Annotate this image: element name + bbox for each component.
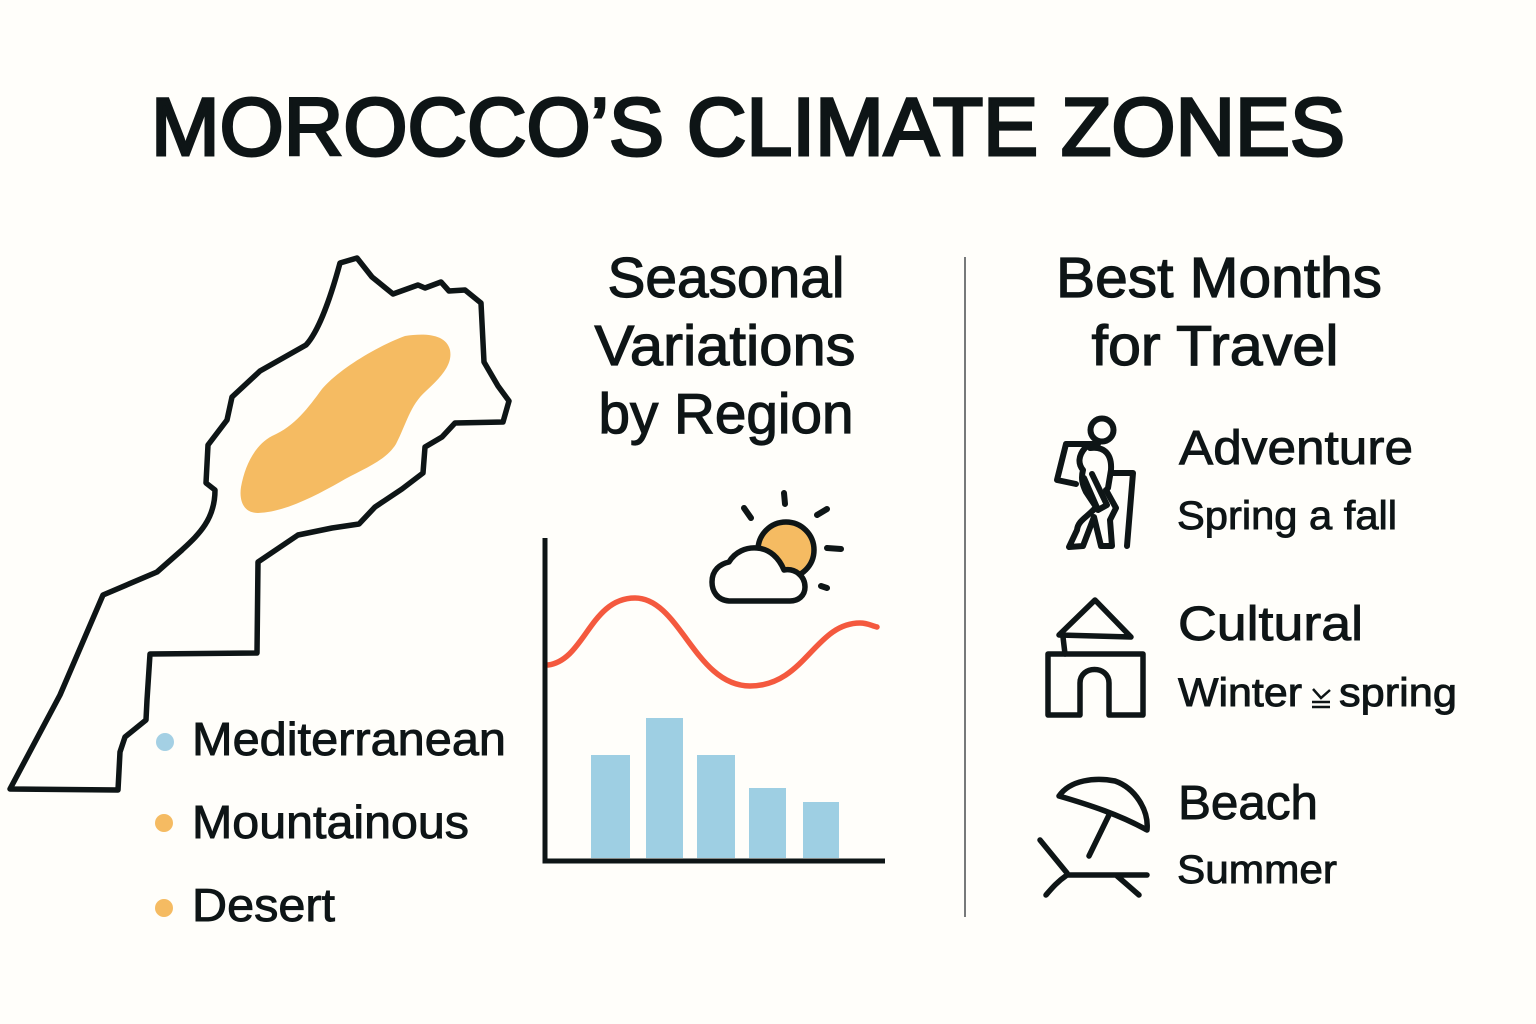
temperature curve [548,598,877,686]
chart: temperature curve and rainfall bars [545,538,885,861]
item: adventure: Spring a fall [1177,494,1397,538]
divider [964,257,966,917]
heading: seasonal variations [594,246,856,446]
item: beach: Summer [1177,848,1337,892]
legend [155,713,506,931]
heading: best months [1056,246,1382,378]
map outline [10,258,509,790]
heading: best months: for Travel [1092,314,1338,378]
heading: best months: Best Months [1056,246,1382,310]
legend item: Mountainous: Mountainous [192,796,469,848]
heading: seasonal variations: Seasonal [608,246,844,310]
icon: hiker [1057,418,1133,547]
panel: climate map [10,258,509,790]
icon: sun and cloud [712,493,841,601]
icon: building [1048,600,1143,715]
item: beach [1040,777,1337,895]
heading: seasonal variations: Variations [594,314,856,378]
bars [591,718,839,858]
label: Cultural [1178,598,1363,651]
item: cultural [1048,598,1457,715]
legend item: Mediterranean: Mediterranean [192,713,506,765]
item: cultural: Winter [1178,671,1302,715]
legend item: Desert: Desert [192,879,335,931]
item: adventure [1057,418,1413,547]
axes [545,538,885,861]
icon: beach umbrella and lounger [1040,779,1147,895]
item: cultural: spring [1339,671,1457,715]
label: Adventure [1179,422,1413,475]
desert zone [241,335,450,513]
heading: seasonal variations: by Region [598,382,854,446]
label: Beach [1178,777,1318,830]
title: MOROCCO’S CLIMATE ZONES [151,82,1345,173]
